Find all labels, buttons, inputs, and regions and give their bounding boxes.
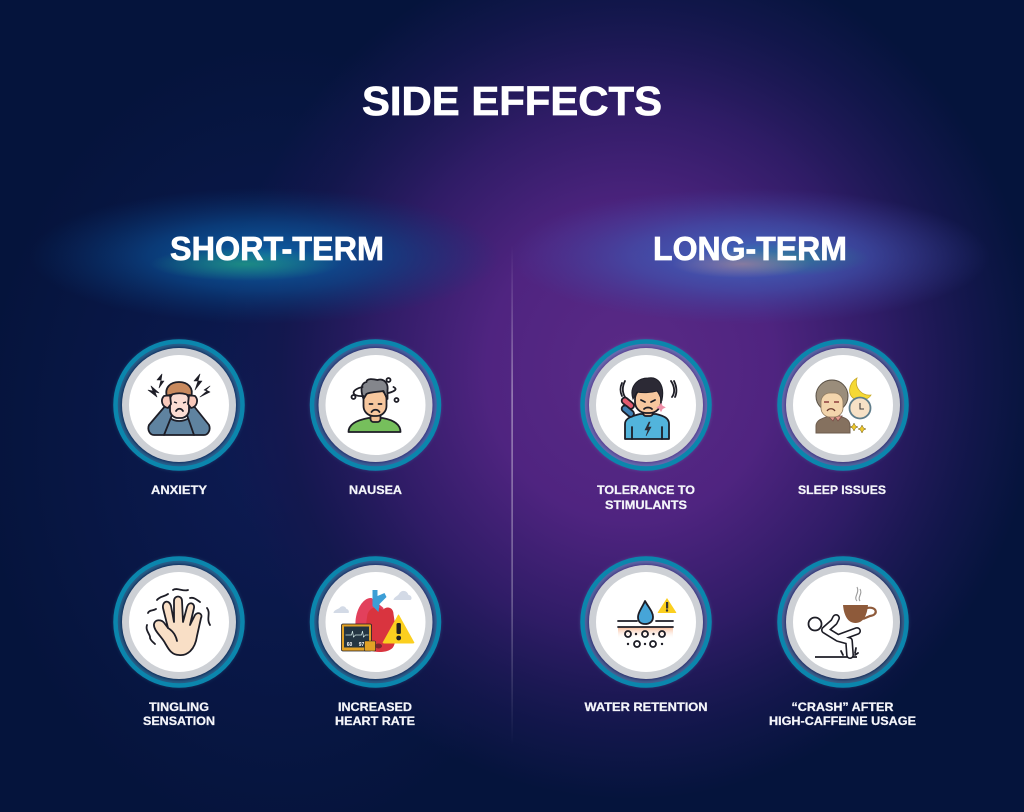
icon detail: pills xyxy=(620,396,635,418)
panel: crash after high-caffeine usage xyxy=(780,558,906,686)
label: increased heart rate: HEART RATE xyxy=(335,714,415,728)
panel: tolerance to stimulants xyxy=(582,342,710,468)
label: increased heart rate xyxy=(335,700,415,728)
panel: nausea xyxy=(312,342,439,468)
icon: water drop on skin xyxy=(618,598,676,647)
heading: short-term: SHORT-TERM xyxy=(170,230,384,267)
label: crash after high-caffeine usage: HIGH-CAFFEINE USAGE xyxy=(769,714,916,728)
icon: tingling hand xyxy=(147,589,210,655)
icon: heart with monitor and warning: 60 xyxy=(347,642,352,648)
icon: person falling with coffee cup xyxy=(808,587,876,657)
label: tolerance to stimulants xyxy=(597,483,695,512)
label: sleep issues: SLEEP ISSUES xyxy=(798,483,886,497)
panel: increased heart rate xyxy=(312,558,439,686)
label: anxiety: ANXIETY xyxy=(151,483,207,497)
glow: long-term xyxy=(510,188,990,324)
title: SIDE EFFECTS xyxy=(362,78,662,124)
icon: tired person with moon and clock xyxy=(816,378,871,433)
icon: man with pills xyxy=(620,378,676,439)
label: tolerance to stimulants: STIMULANTS xyxy=(605,498,687,512)
label: tolerance to stimulants: TOLERANCE TO xyxy=(597,483,695,497)
label: increased heart rate: INCREASED xyxy=(338,700,412,714)
label: nausea: NAUSEA xyxy=(349,483,402,497)
icon: heart with monitor and warning xyxy=(334,590,414,652)
label: crash after high-caffeine usage xyxy=(769,700,916,728)
panel: sleep issues xyxy=(780,342,906,468)
glow: short-term xyxy=(30,188,500,324)
panel: anxiety xyxy=(116,342,242,468)
label: crash after high-caffeine usage: “CRASH” AFTER xyxy=(792,700,894,714)
label: water retention: WATER RETENTION xyxy=(584,700,708,714)
icon: heart with monitor and warning: 97 xyxy=(359,642,364,648)
heading: long-term: LONG-TERM xyxy=(653,230,847,267)
label: tingling sensation: TINGLING xyxy=(149,700,209,714)
label: tingling sensation xyxy=(143,700,215,728)
panel: water retention xyxy=(582,558,710,686)
center divider xyxy=(512,245,513,745)
label: tingling sensation: SENSATION xyxy=(143,714,215,728)
icon: anxious person xyxy=(148,374,210,435)
icon: nauseous man xyxy=(348,378,400,432)
panel: tingling sensation xyxy=(116,558,242,686)
